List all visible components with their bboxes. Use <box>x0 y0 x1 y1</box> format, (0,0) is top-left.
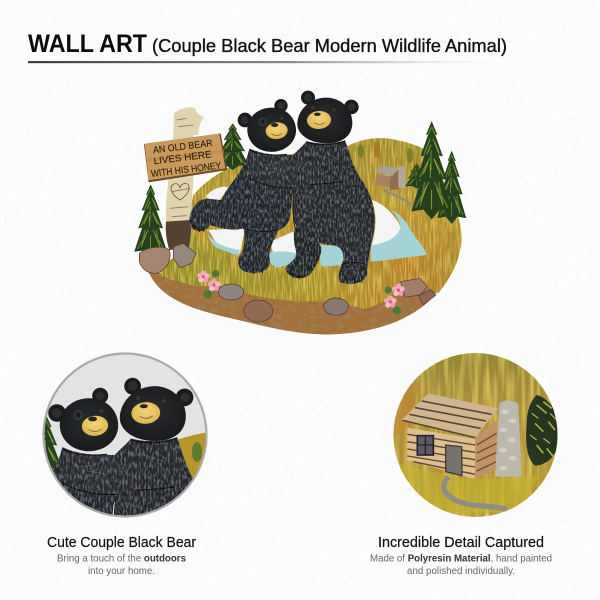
pine <box>526 395 560 466</box>
caption: incredible detail captured: Incredible Detail Captured <box>378 534 544 551</box>
birch post <box>166 107 204 250</box>
flowers <box>197 270 405 315</box>
wooden sign: AN OLD BEAR <box>152 138 213 156</box>
stones <box>139 243 436 322</box>
title heading <box>28 30 507 58</box>
reflection under plaque <box>160 314 440 362</box>
caption: incredible detail captured: Made of Polyresin Material, hand painted <box>370 552 552 564</box>
wooden sign <box>144 133 227 182</box>
inset ring <box>44 354 206 516</box>
wooden sign: WITH HIS HONEY <box>150 160 222 180</box>
caption: incredible detail captured <box>370 534 552 577</box>
circular inset: bears close-up <box>42 352 208 518</box>
window holes <box>206 138 401 253</box>
cabin <box>373 166 412 205</box>
inset artwork <box>44 378 206 516</box>
title heading: WALL ART <box>28 30 147 58</box>
title underline <box>28 61 498 63</box>
main illustration: bear couple wall plaque <box>134 91 466 334</box>
circular inset: cabin close-up <box>390 350 560 520</box>
title heading: (Couple Black Bear Modern Wildlife Animal) <box>152 36 507 56</box>
caption: cute couple black bear: Cute Couple Black Bear <box>47 534 196 551</box>
two hugging black bears <box>189 91 375 284</box>
caption: cute couple black bear: into your home. <box>88 565 155 577</box>
plaque meadow back <box>180 138 462 293</box>
distant trees on hill <box>358 142 413 163</box>
caption: cute couple black bear <box>47 534 196 577</box>
wooden sign: LIVES HERE <box>153 149 213 167</box>
pine trees <box>134 121 466 258</box>
caption: cute couple black bear: Bring a touch of the outdoors <box>57 552 186 564</box>
front grass <box>160 228 461 309</box>
inset cabin artwork <box>393 382 560 515</box>
caption: incredible detail captured: and polished individually. <box>407 565 515 577</box>
river <box>207 210 427 268</box>
dirt ground <box>148 272 440 334</box>
